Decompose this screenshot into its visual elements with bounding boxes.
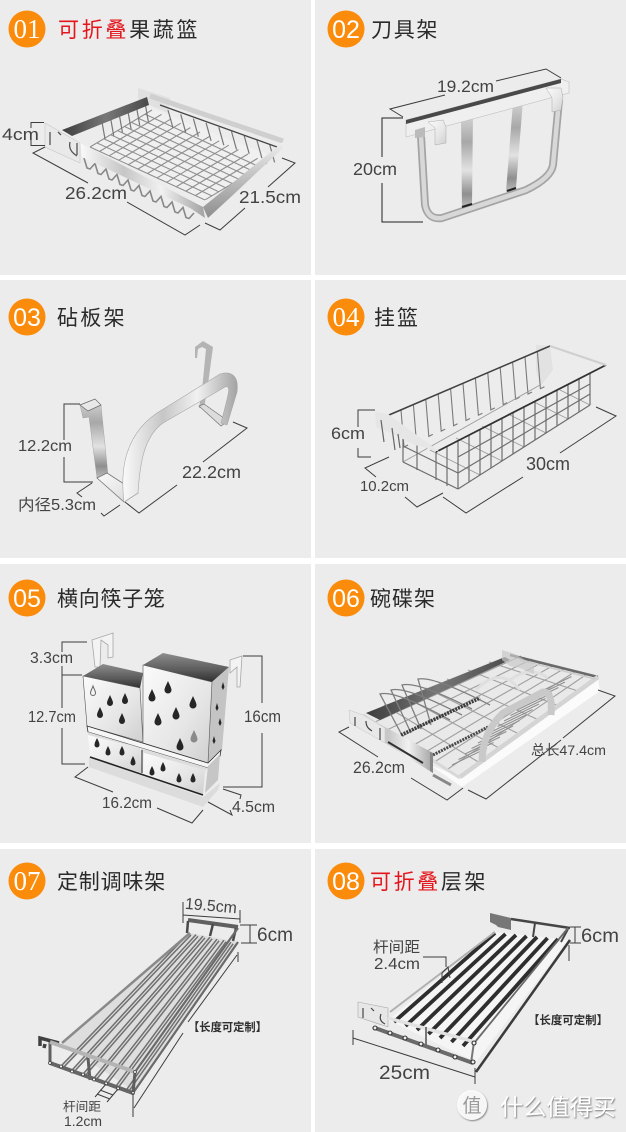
label: 20cm <box>353 118 423 222</box>
badge: 06 <box>328 580 364 616</box>
heading: cutting board rack: 砧板架 <box>57 307 127 330</box>
label: 4cm: 4cm <box>2 125 39 144</box>
label: width 19.5cm: 19.5cm <box>184 896 238 917</box>
icon: dish rack <box>349 650 600 787</box>
label: 22.2cm <box>125 422 247 513</box>
label: 20cm: 20cm <box>353 159 397 179</box>
label: 6cm <box>331 410 375 457</box>
badge: 01 <box>8 10 46 48</box>
label: 4.5cm: 4.5cm <box>232 799 275 816</box>
label: 10.2cm <box>360 457 443 507</box>
label: 6cm: 6cm <box>581 926 619 947</box>
label: 26.2cm <box>33 147 200 235</box>
label: 21.5cm: 21.5cm <box>239 187 301 207</box>
label: 6cm <box>240 925 293 946</box>
badge: 08 <box>328 862 364 900</box>
label: 16cm: 16cm <box>244 708 281 726</box>
badge: 02: 02 <box>332 16 360 44</box>
label: customisable length <box>133 952 267 1117</box>
heading: dish rack: 碗碟架 <box>370 588 436 611</box>
label: rod spacing 2.4cm <box>373 939 450 983</box>
icon: knife rack <box>406 79 569 218</box>
label: 4.5cm <box>208 789 275 816</box>
label: 25cm <box>353 1030 475 1084</box>
label: customisable length: 【长度可定制】 <box>188 1020 267 1034</box>
label: 16.2cm: 16.2cm <box>102 795 152 812</box>
heading: foldable fruit basket: 可折叠果蔬篮 <box>58 19 200 42</box>
label: 16cm <box>223 656 281 787</box>
label: inner diameter 5.3cm <box>18 483 120 516</box>
panel: 03 cutting board rack <box>0 280 311 558</box>
icon: shelf <box>358 913 570 1072</box>
heading: knife rack: 刀具架 <box>371 19 439 42</box>
label: rod spacing 2.4cm: 2.4cm <box>374 956 420 973</box>
label: 3.3cm <box>30 642 87 675</box>
badge: 02 <box>328 10 364 48</box>
label: 10.2cm: 10.2cm <box>360 478 409 495</box>
panel: 07 custom spice rack <box>0 849 311 1132</box>
label: customisable length: 【长度可定制】 <box>528 1013 608 1027</box>
label: 26.2cm: 26.2cm <box>353 759 405 777</box>
icon: chopstick cage <box>83 633 242 807</box>
badge: 04: 04 <box>332 302 360 332</box>
panel: 04 hanging basket <box>315 280 626 558</box>
badge: 07 <box>8 862 46 900</box>
panel: 02 knife rack <box>315 0 626 275</box>
watermark <box>457 1090 616 1120</box>
label: 6cm <box>569 926 619 961</box>
heading: custom spice rack: 定制调味架 <box>57 871 166 894</box>
badge: 03: 03 <box>13 304 41 332</box>
watermark: 值 <box>462 1095 482 1117</box>
label: 25cm: 25cm <box>379 1063 430 1084</box>
label: 12.2cm: 12.2cm <box>18 438 72 455</box>
badge: 08: 08 <box>332 868 360 896</box>
label: 4cm <box>2 122 45 146</box>
panel: 05 chopstick cage <box>0 564 311 843</box>
icon: cutting board rack <box>80 341 237 502</box>
label: rod spacing 1.2cm: 杆间距 <box>63 1100 101 1114</box>
badge: 05 <box>8 580 46 616</box>
label: rod spacing 1.2cm <box>63 1084 118 1129</box>
icon: long wire basket <box>375 345 606 489</box>
panel: 01 fruit basket <box>0 0 311 275</box>
badge: 07: 07 <box>14 866 40 896</box>
badge: 04 <box>328 298 364 336</box>
label: 19.2cm: 19.2cm <box>437 77 494 96</box>
panel: 06 dish rack <box>315 564 626 843</box>
watermark: 什么值得买 <box>500 1094 616 1120</box>
label: 26.2cm: 26.2cm <box>65 183 127 203</box>
label: total length 47.4cm <box>468 690 615 799</box>
heading: foldable shelf: 可折叠层架 <box>370 871 488 894</box>
badge: 06: 06 <box>332 585 360 613</box>
badge: 05: 05 <box>13 585 41 613</box>
label: 30cm <box>443 407 616 513</box>
icon: spice rack <box>40 920 238 1095</box>
label: 19.2cm <box>390 69 561 117</box>
label: rod spacing 1.2cm: 1.2cm <box>64 1114 102 1129</box>
label: 21.5cm <box>205 158 301 230</box>
label: 6cm: 6cm <box>331 424 365 443</box>
label: 3.3cm: 3.3cm <box>30 650 73 667</box>
label: 22.2cm: 22.2cm <box>182 462 241 482</box>
badge: 03 <box>8 298 46 336</box>
label: 12.2cm <box>18 404 93 482</box>
label: 26.2cm <box>339 727 463 800</box>
badge: 01: 01 <box>14 14 40 44</box>
label: inner diameter 5.3cm: 内径5.3cm <box>18 496 96 514</box>
label: 30cm: 30cm <box>526 454 570 474</box>
icon: wire basket <box>45 88 283 218</box>
label: 16.2cm <box>75 767 203 823</box>
heading: hanging basket: 挂篮 <box>374 307 420 330</box>
label: total length 47.4cm: 总长47.4cm <box>531 742 606 758</box>
panel: 08 foldable shelf <box>315 849 626 1132</box>
label: 12.7cm <box>28 675 85 764</box>
label: 12.7cm: 12.7cm <box>28 709 76 726</box>
heading: horizontal chopstick cage: 横向筷子笼 <box>57 588 166 611</box>
label: 6cm: 6cm <box>257 925 293 946</box>
label: rod spacing 2.4cm: 杆间距 <box>373 939 420 956</box>
